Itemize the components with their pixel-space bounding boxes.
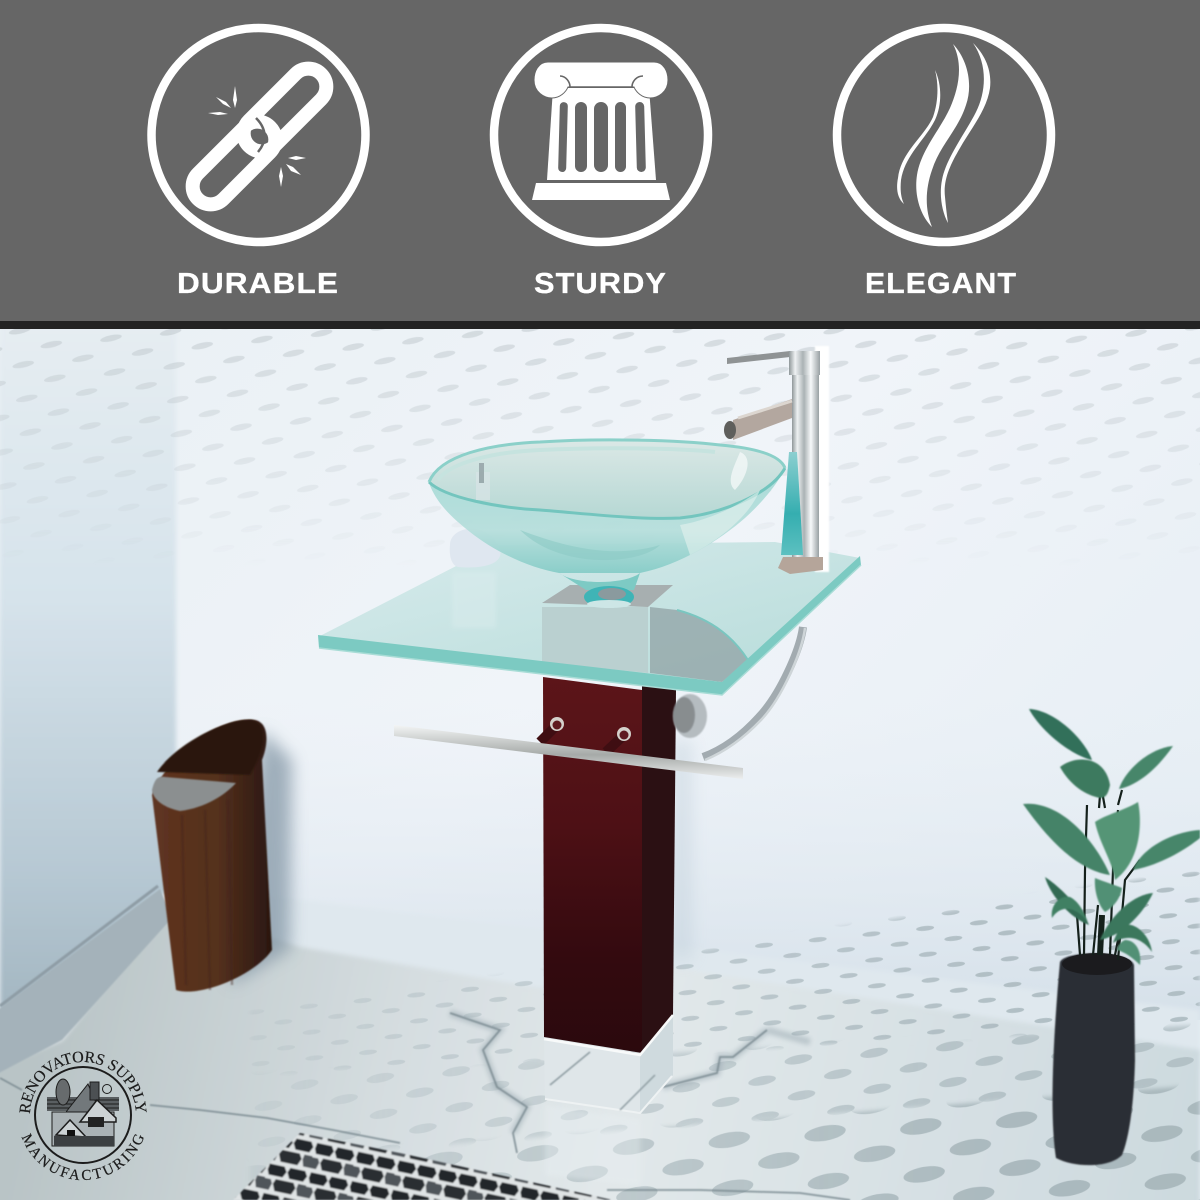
pegs <box>540 717 631 752</box>
pedestal side and front <box>642 680 676 1053</box>
plant with pot <box>1023 709 1200 1165</box>
icon: elegant waves in circle <box>837 28 1051 242</box>
logo: Renovators Supply Manufacturing <box>19 1051 147 1180</box>
left wall <box>0 320 176 1012</box>
wastebasket <box>152 720 292 992</box>
vanity pedestal <box>543 677 692 1185</box>
icon: broken chain link in circle <box>152 28 366 242</box>
drain <box>559 573 640 590</box>
faucet <box>724 346 829 574</box>
wall shadow <box>672 740 692 960</box>
wall polka dots <box>0 329 1200 514</box>
floor polka dots <box>252 872 1200 1200</box>
silver square mount <box>542 585 673 607</box>
floor <box>0 905 1200 1200</box>
countertop edge <box>318 556 861 695</box>
chrome foot <box>544 1040 640 1112</box>
leaves <box>1023 709 1200 965</box>
glass countertop <box>318 542 861 695</box>
soap pump seen through glass <box>476 463 490 500</box>
towel bar <box>394 717 743 779</box>
logo house <box>47 1079 119 1146</box>
panel: product photo of bathroom <box>0 320 1200 1200</box>
baseboard left <box>0 889 172 1075</box>
drain pipe and flange <box>673 627 805 760</box>
logo bottom text: MANUFACTURING <box>22 1132 144 1180</box>
curved reflection <box>650 607 748 682</box>
header band <box>0 0 1200 329</box>
icon: column in circle <box>494 28 708 242</box>
soap dispenser <box>450 529 500 567</box>
stems <box>1077 770 1140 960</box>
pot <box>1053 953 1135 1165</box>
patterned rug <box>233 1133 613 1200</box>
label: elegant: ELEGANT <box>865 268 1017 300</box>
marble veins <box>450 1013 810 1133</box>
reflection of soap <box>452 572 496 628</box>
label: durable: DURABLE <box>177 268 339 300</box>
label: sturdy: STURDY <box>534 268 667 300</box>
back wall <box>0 328 1200 1200</box>
baseboard right <box>176 885 1200 1070</box>
glass vessel bowl <box>429 440 785 608</box>
logo top text: RENOVATORS SUPPLY <box>19 1051 147 1114</box>
